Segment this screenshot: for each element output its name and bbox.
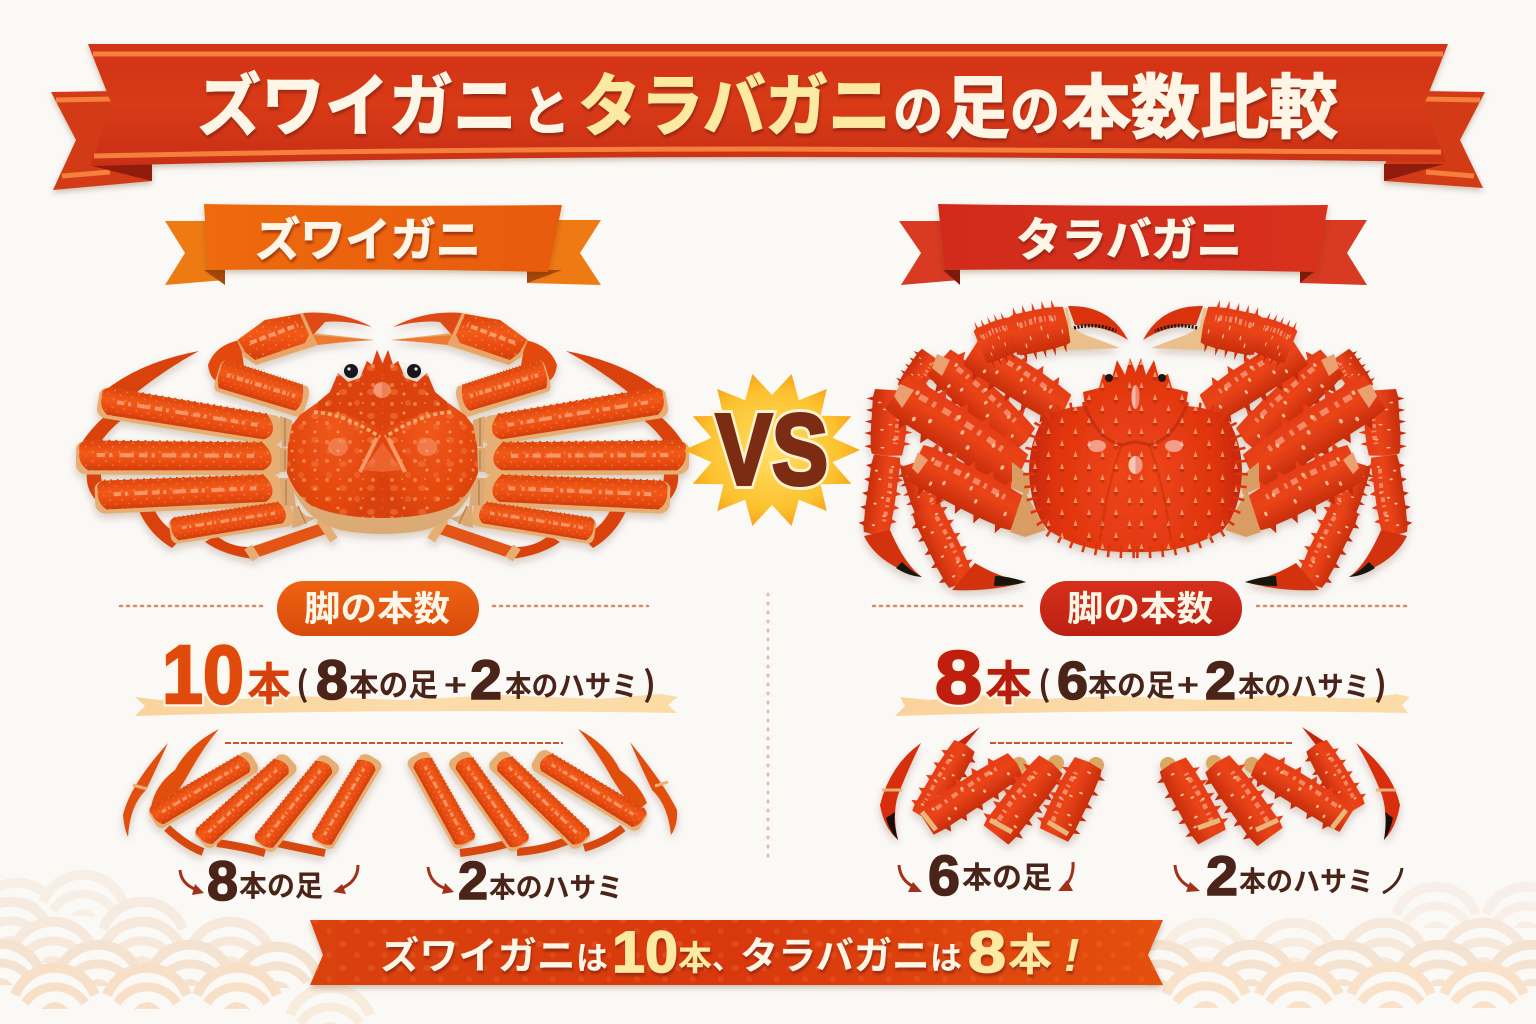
count text: 8本: 本: [985, 645, 1032, 714]
count text: 10本: 本のハサミ: [505, 663, 638, 705]
title: と: [522, 67, 570, 146]
banner text: 、: [712, 934, 742, 978]
pill: 脚の本数 (left): 脚の本数: [304, 581, 450, 632]
label: 2本のハサミ (left): 本のハサミ: [489, 866, 623, 906]
carapace half: [1029, 358, 1136, 552]
title: 足: [945, 53, 1010, 152]
arrows around 8本の足: [180, 865, 358, 895]
eye: [344, 364, 358, 378]
VS badge: VS: [716, 394, 828, 506]
label: 6本の足: 6: [928, 844, 960, 908]
label: 6本の足: [928, 844, 1052, 908]
pill: 脚の本数 (right): [1040, 581, 1242, 636]
king crab 2 claws: [1151, 727, 1400, 851]
title: ズワイガニ: [197, 51, 517, 150]
heading ribbon: タラバガニ: タラバガニ: [1016, 204, 1242, 270]
count text: 10本: 10: [162, 628, 244, 721]
count text: 8本: 8: [935, 636, 982, 719]
crab half (right): [1128, 296, 1414, 593]
carapace half: [287, 473, 383, 534]
walking legs: [96, 386, 286, 447]
count text: 10本: 2: [470, 648, 502, 711]
highlight band (right): [895, 694, 1410, 716]
label: 2本のハサミ (right): 2: [1206, 844, 1238, 907]
crab half (left): [857, 296, 1142, 593]
label: 8本の足: [207, 849, 323, 912]
banner text: は: [576, 933, 608, 979]
VS badge: [684, 374, 860, 526]
heading ribbon: ズワイガニ: ズワイガニ: [255, 204, 481, 270]
banner text: は: [930, 933, 962, 979]
cheliped: [958, 329, 1078, 431]
banner text: タラバガニ: [740, 925, 930, 980]
banner text: 10: [612, 920, 678, 985]
count text: 8本: [935, 636, 1387, 719]
title: 本数比較: [1062, 52, 1338, 153]
eye: [1105, 374, 1113, 382]
shell highlights: [1088, 440, 1106, 452]
bottom banner: [310, 919, 1163, 985]
cheliped arm, wrist, palm and fingers: [208, 340, 244, 382]
count text: 8本: +: [1177, 661, 1199, 705]
label: 2本のハサミ (left): [458, 851, 623, 911]
banner text: 本: [1008, 919, 1052, 983]
count text: 8本: 本の足: [1088, 661, 1175, 705]
pill: 脚の本数 (right): 脚の本数: [1067, 581, 1213, 632]
ribbon main band: [88, 44, 1448, 166]
VS badge: VS: [716, 394, 828, 506]
label: 6本の足: 本の足: [962, 853, 1052, 897]
pill: 脚の本数 (left): [277, 581, 479, 636]
title: [197, 51, 1338, 153]
count text: 10本: [162, 628, 656, 721]
dividers: [120, 594, 1407, 862]
count text: 10本: 10: [162, 628, 244, 721]
highlight band (left): [135, 694, 678, 716]
heading ribbon: タラバガニ: [899, 204, 1367, 285]
count text: 8本: ): [1374, 657, 1387, 706]
walking legs: [922, 343, 1043, 461]
count text: 8本: 6: [1057, 651, 1088, 711]
banner text: 本: [678, 931, 712, 980]
title ribbon: [51, 44, 1485, 190]
label: 2本のハサミ (left): 2: [458, 851, 488, 911]
count text: 8本: 8: [935, 636, 982, 719]
count text: 8本: (: [1038, 657, 1051, 706]
count text: 10本: 本の足: [349, 660, 438, 705]
count text: 10本: +: [444, 661, 467, 705]
snow crab 8 legs: [123, 729, 384, 855]
arrow: 2本のハサミ left: [428, 867, 454, 894]
crab half (right): [373, 313, 689, 559]
title: の: [1010, 67, 1060, 146]
label: 2本のハサミ (right): [1206, 844, 1374, 907]
label: 2本のハサミ (right): 本のハサミ: [1239, 860, 1374, 900]
banner text: ズワイガニ: [380, 925, 576, 980]
snow crab 2 claws: [405, 729, 677, 854]
outer leg segments: [892, 346, 945, 401]
heading ribbon: ズワイガニ: [165, 204, 601, 285]
label: 8本の足: 本の足: [239, 863, 323, 905]
king crab 6 legs: [880, 727, 1110, 849]
banner text: [380, 919, 1079, 985]
shell ridges and highlights: [314, 412, 380, 437]
title: タラバガニ: [578, 51, 891, 150]
arrows around 2本のハサミ right: [1175, 865, 1402, 893]
thin leg tips: [79, 351, 255, 559]
illustration: king crab: [857, 296, 1414, 593]
count text: 8本: 2: [1205, 651, 1236, 711]
ribbon right tail: [1384, 91, 1485, 188]
seigaiha wave pattern: left: [0, 870, 376, 1024]
count text: 10本: 8: [316, 648, 348, 711]
title: の: [893, 67, 943, 146]
count text: 10本: 本: [247, 648, 291, 713]
arrows around 6本の足: [899, 862, 1073, 892]
illustration: snow crab: [76, 313, 689, 559]
banner text: 8: [968, 920, 1006, 985]
ribbon left tail: [51, 91, 152, 190]
seigaiha wave pattern: right: [1113, 882, 1536, 1024]
count text: 10本: ): [643, 657, 656, 706]
crab half (left): [76, 313, 392, 559]
banner text: !: [1064, 929, 1079, 981]
count text: 8本: 本のハサミ: [1238, 665, 1370, 705]
label: 8本の足: 8: [207, 849, 238, 912]
count text: 10本: (: [296, 657, 309, 706]
